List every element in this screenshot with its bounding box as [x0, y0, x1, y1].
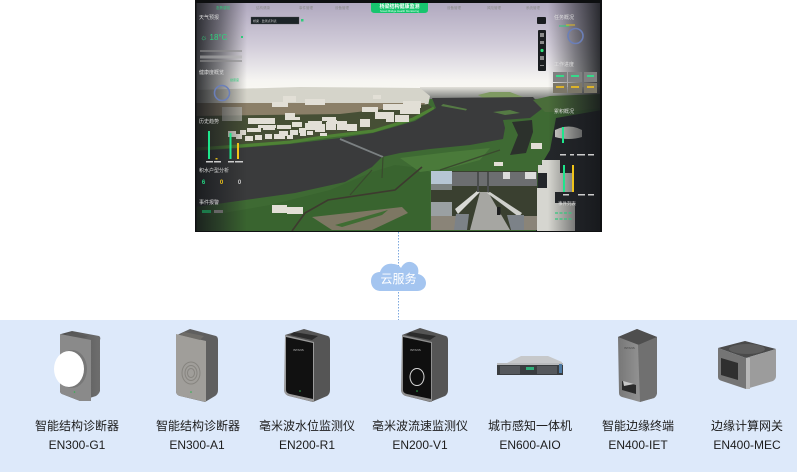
- right panel: task overview: [554, 14, 583, 44]
- sky: [195, 0, 602, 92]
- title badge: [371, 3, 428, 13]
- search box: 桥梁 · 监测点列表: [253, 18, 277, 23]
- label: EN200-R1: [259, 418, 355, 452]
- label: EN600-AIO: EN600-AIO: [499, 438, 561, 452]
- river inlet: [510, 120, 533, 155]
- device: EN400-IET: [618, 329, 657, 402]
- peninsula ground: [195, 104, 433, 148]
- right panel: bar charts: [554, 108, 594, 196]
- label: EN400-MEC: EN400-MEC: [713, 438, 781, 452]
- right panel: task overview: 任务概况: [554, 14, 574, 21]
- device panel: [0, 320, 797, 472]
- title badge: Smart Bridge Health Monitoring: [380, 9, 419, 13]
- left panel: gauge: [199, 69, 239, 100]
- title badge: 桥梁结构健康监测: [379, 3, 420, 10]
- left panel: weather: 天气预报: [199, 14, 219, 21]
- map toolbar: [537, 17, 546, 71]
- label: EN300-A1: 智能结构诊断器: [156, 418, 240, 433]
- left panel: water stats: 0: [238, 180, 242, 186]
- frame strips: [195, 0, 602, 232]
- top navigation: [216, 6, 540, 10]
- left panel: weather: ☼ 18°C: [200, 33, 228, 42]
- camera inset: bridge photo: [431, 171, 537, 230]
- white buildings: [228, 95, 542, 214]
- label: EN400-MEC: [711, 418, 783, 452]
- right panel: work progress tiles: [553, 61, 597, 93]
- brown gravel patch: [312, 207, 408, 230]
- device: EN400-IET: INTANS: [624, 346, 635, 350]
- right panel: alerts: [555, 200, 576, 219]
- device: EN200-R1: INTANS: [293, 348, 304, 352]
- dashboard screenshot: 3D bridge monitoring scene: [195, 0, 602, 232]
- left panel: water stats: 0: [220, 180, 224, 186]
- right shore lighter land: [533, 94, 602, 112]
- label: EN600-AIO: 城市感知一体机: [488, 418, 572, 433]
- left panel: events: [199, 199, 223, 213]
- top navigation: 结构健康: [256, 5, 270, 10]
- left panel: bar chart: 历史趋势: [199, 118, 219, 125]
- cloud service badge: 云服务: [380, 271, 417, 286]
- device: EN400-MEC: [718, 341, 776, 389]
- label: EN300-A1: EN300-A1: [169, 438, 225, 452]
- peninsula green edge: [195, 108, 434, 149]
- label: EN200-V1: EN200-V1: [392, 438, 448, 452]
- label: EN600-AIO: [488, 418, 572, 452]
- left panel: water stats: [199, 168, 241, 184]
- label: EN300-G1: [35, 418, 119, 452]
- spit and mid island: [441, 104, 520, 115]
- top navigation: 事件管理: [299, 5, 313, 10]
- label: EN200-R1: 亳米波水位监测仪: [259, 418, 355, 433]
- left panel: weather: [199, 14, 243, 62]
- label: EN400-IET: 智能边缘终端: [602, 418, 674, 433]
- left panel: water stats: 积水户型分析: [199, 167, 229, 174]
- cloud service badge: [371, 262, 426, 291]
- top navigation: 设备管理: [447, 5, 461, 10]
- search box: [251, 17, 304, 24]
- label: EN400-IET: [602, 418, 674, 452]
- far haze strip: [420, 87, 602, 99]
- left panel: bar chart: [199, 118, 243, 162]
- right dark panel overlay: [548, 0, 602, 232]
- left panel: events: 事件报警: [199, 199, 219, 206]
- top navigation: 系统管理: [526, 5, 540, 10]
- device: EN200-V1: [401, 328, 448, 402]
- right-side white tower models: [537, 126, 582, 232]
- far island: [478, 92, 522, 98]
- top navigation: 态势感知: [216, 5, 230, 10]
- label: EN200-V1: 亳米波流速监测仪: [372, 418, 468, 433]
- device: EN300-G1: [54, 331, 100, 401]
- label: EN300-G1: 智能结构诊断器: [35, 418, 119, 433]
- dark trails: [292, 167, 422, 231]
- footbridge: [340, 139, 383, 157]
- dotted connector line: [398, 232, 400, 320]
- label: EN200-V1: [372, 418, 468, 452]
- device: EN600-AIO server: [497, 356, 563, 375]
- label: EN300-G1: EN300-G1: [49, 438, 106, 452]
- label: EN300-A1: [156, 418, 240, 452]
- main river: [195, 97, 543, 207]
- terrain base: [195, 96, 602, 232]
- top navigation: 设备管理: [335, 5, 349, 10]
- right panel: work progress tiles: 工作进度: [554, 61, 574, 68]
- label: EN200-R1: EN200-R1: [279, 438, 335, 452]
- device: EN200-V1: INTANS: [410, 348, 421, 352]
- right panel: bar charts: 累积概况: [554, 108, 574, 115]
- left dark panel overlay: [195, 0, 247, 232]
- top navigation: 风险管理: [487, 5, 501, 10]
- left panel: gauge: 健康度: [230, 77, 239, 82]
- left panel: water stats: 6: [202, 180, 206, 186]
- right panel: alerts: 事件列表: [558, 200, 576, 207]
- label: EN400-IET: EN400-IET: [608, 438, 668, 452]
- top black strip: [195, 0, 602, 3]
- darker near-bank field: [195, 165, 430, 232]
- device: EN300-A1: [176, 329, 218, 402]
- brown urban ground: [196, 103, 425, 116]
- left panel: gauge: 健康度概览: [199, 69, 224, 76]
- label: EN400-MEC: 边缘计算网关: [711, 418, 783, 433]
- far city band: [195, 87, 430, 106]
- device: EN200-R1: [284, 329, 330, 402]
- right dark water: [536, 110, 602, 232]
